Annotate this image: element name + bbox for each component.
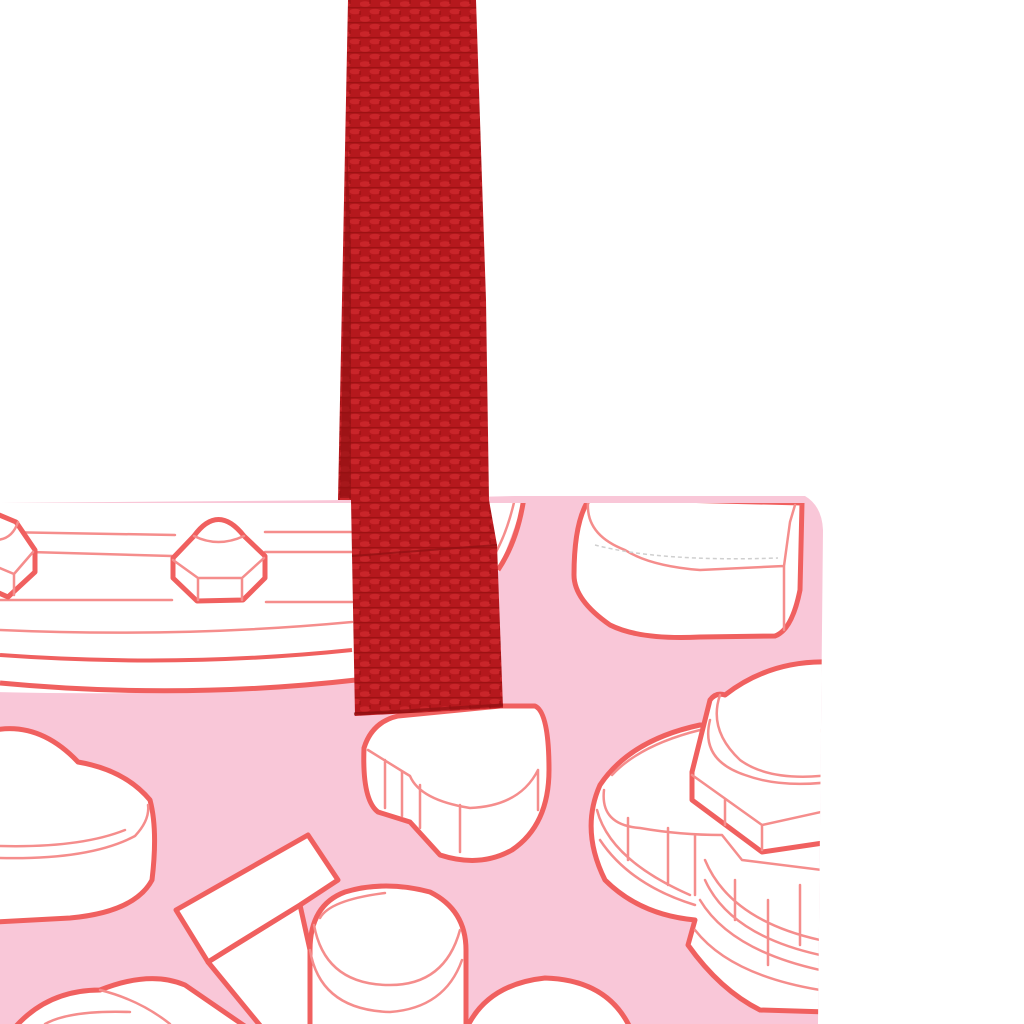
red woven strap — [338, 0, 503, 716]
pattern: long bar with bolts — [0, 500, 356, 693]
bag body: pink fabric — [0, 496, 823, 1024]
pattern: heart block centre — [364, 706, 549, 860]
pattern: cross bar and cylinder bottom — [176, 835, 466, 1024]
strap stitched edge — [352, 545, 497, 556]
strap fold shadow — [340, 140, 351, 498]
pattern: fragment bottom left — [5, 979, 265, 1024]
bag pattern shapes — [0, 496, 830, 1024]
icon: hex bolt centre — [173, 520, 265, 601]
pattern: fragment bottom centre — [462, 978, 635, 1024]
pattern: heart block left — [0, 729, 155, 922]
pattern: stacked hearts right — [591, 662, 830, 1012]
pattern: corner fragment near strap — [490, 503, 520, 572]
icon: hex bolt left — [0, 512, 35, 597]
pattern: rounded block top right — [574, 498, 802, 638]
